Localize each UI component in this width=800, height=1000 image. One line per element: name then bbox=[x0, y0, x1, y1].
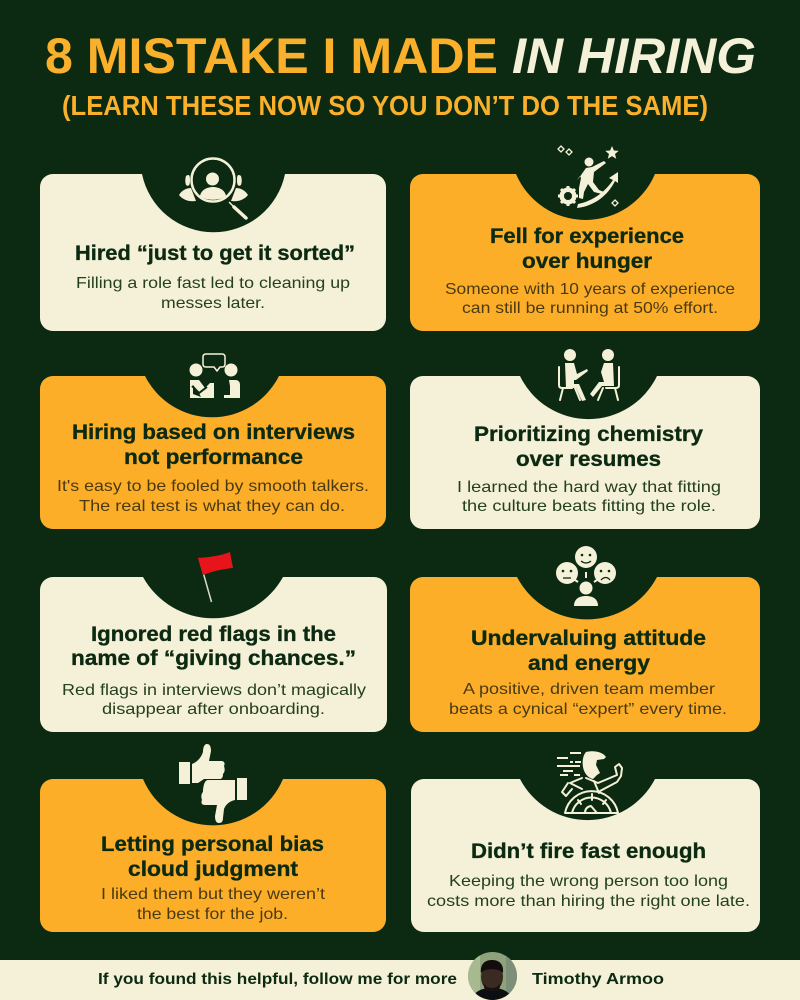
heading: and energy bbox=[528, 652, 650, 675]
panel: fell for experience bbox=[410, 146, 760, 331]
panel: ignored red flags bbox=[40, 552, 387, 732]
author name: Timothy Armoo bbox=[532, 971, 664, 988]
icon: magnifier over people bbox=[179, 158, 248, 218]
heading: over resumes bbox=[516, 448, 661, 471]
heading: not performance bbox=[124, 446, 303, 469]
footer bar bbox=[0, 952, 800, 1000]
body text bbox=[445, 281, 735, 317]
heading: Letting personal bias bbox=[101, 833, 324, 856]
panel: letting personal bias bbox=[40, 744, 386, 932]
body text bbox=[457, 479, 721, 515]
heading: Prioritizing chemistry bbox=[474, 423, 703, 446]
heading: cloud judgment bbox=[128, 858, 298, 881]
heading bbox=[471, 627, 706, 675]
title: 8 MISTAKE I MADE bbox=[45, 28, 498, 84]
heading: Fell for experience bbox=[490, 225, 684, 248]
title: IN HIRING bbox=[512, 28, 756, 84]
body text: Filling a role fast led to cleaning up bbox=[76, 275, 350, 292]
body text bbox=[76, 275, 350, 312]
heading bbox=[71, 623, 356, 670]
panel: hired just to get it sorted bbox=[40, 158, 386, 331]
body text bbox=[427, 873, 750, 910]
heading: Ignored red flags in the bbox=[91, 623, 336, 646]
heading: Undervaluing attitude bbox=[471, 627, 706, 650]
panel: prioritizing chemistry bbox=[410, 349, 760, 529]
panel: hiring based on interviews bbox=[40, 354, 386, 529]
panel: didn't fire fast enough bbox=[411, 751, 760, 932]
heading bbox=[72, 421, 355, 469]
body text: Someone with 10 years of experience bbox=[445, 281, 735, 298]
body text: The real test is what they can do. bbox=[79, 498, 345, 515]
heading bbox=[101, 833, 324, 881]
body text bbox=[62, 682, 366, 718]
avatar photo bbox=[468, 952, 518, 1000]
body text: A positive, driven team member bbox=[463, 681, 716, 698]
heading: Hiring based on interviews bbox=[72, 421, 355, 444]
body text bbox=[449, 681, 727, 718]
subtitle: (LEARN THESE NOW SO YOU DON’T DO THE SAME) bbox=[62, 90, 708, 121]
heading bbox=[474, 423, 703, 471]
icon: person with speedometer bbox=[557, 751, 622, 813]
body text: messes later. bbox=[161, 295, 265, 312]
icon: two people talking with speech bubble bbox=[190, 354, 240, 398]
body text: the best for the job. bbox=[137, 906, 288, 923]
body text: Keeping the wrong person too long bbox=[449, 873, 728, 890]
icon: climbing figure with gear and star bbox=[558, 146, 619, 208]
heading: Didn’t fire fast enough bbox=[471, 840, 706, 863]
icon: person with three mood faces bbox=[556, 546, 616, 606]
body text: costs more than hiring the right one late. bbox=[427, 893, 750, 910]
body text bbox=[57, 478, 369, 515]
heading: over hunger bbox=[522, 250, 652, 273]
icon: red flag bbox=[198, 552, 233, 602]
body text: beats a cynical “expert” every time. bbox=[449, 701, 727, 718]
body text bbox=[101, 886, 326, 923]
heading: Hired “just to get it sorted” bbox=[75, 242, 355, 265]
body text: Red flags in interviews don’t magically bbox=[62, 682, 366, 699]
icon: thumbs up and thumbs down bbox=[179, 744, 247, 823]
panel: undervaluing attitude bbox=[410, 546, 760, 732]
body text: I learned the hard way that fitting bbox=[457, 479, 721, 496]
heading: name of “giving chances.” bbox=[71, 647, 356, 670]
body text: I liked them but they weren’t bbox=[101, 886, 326, 903]
body text: the culture beats fitting the role. bbox=[462, 498, 716, 515]
heading bbox=[490, 225, 684, 273]
body text: It's easy to be fooled by smooth talkers. bbox=[57, 478, 369, 495]
body text: can still be running at 50% effort. bbox=[462, 300, 718, 317]
body text: disappear after onboarding. bbox=[102, 701, 325, 718]
follow call to action: If you found this helpful, follow me for more bbox=[98, 971, 457, 988]
icon: two seated people in conversation bbox=[559, 349, 619, 401]
title bbox=[45, 28, 756, 84]
